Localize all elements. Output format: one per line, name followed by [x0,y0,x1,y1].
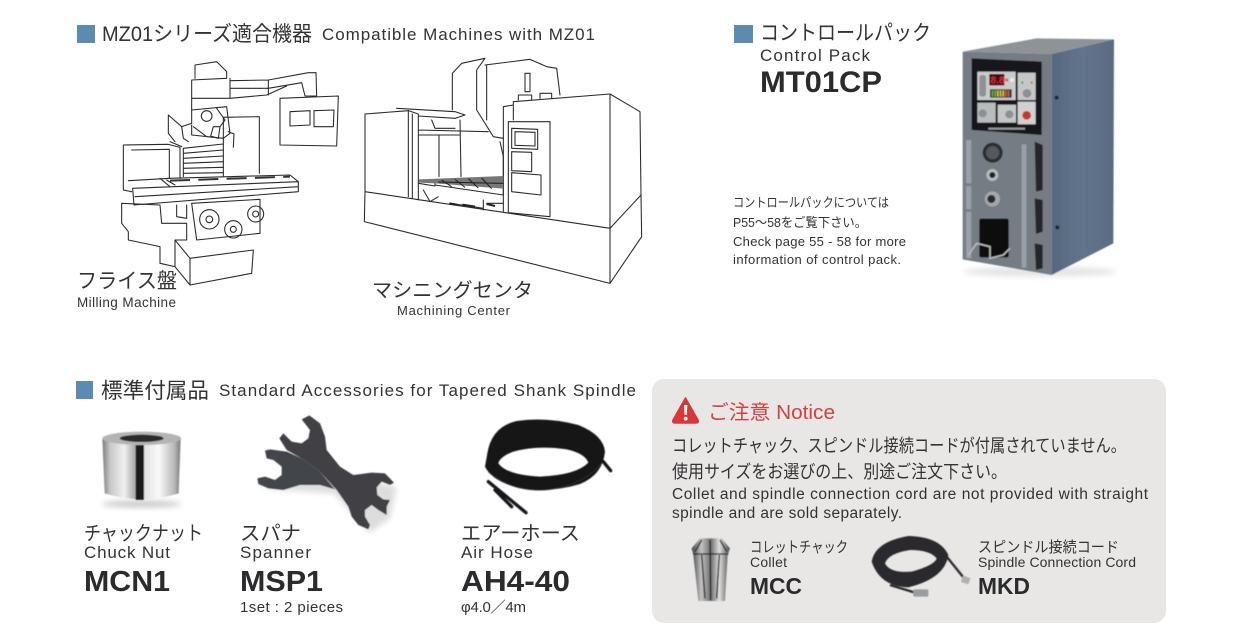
accessory: air hose: AH4-40 [461,566,570,598]
text block: control pack reference: コントロールパックについては [733,195,889,210]
label: milling machine [77,270,177,310]
section heading: compatible machines: Compatible Machines with MZ01 [322,25,595,44]
label: milling machine: フライス盤 [77,270,177,293]
notice body text [672,436,1149,522]
section heading: control pack: MT01CP [760,66,882,99]
notice heading: ご注意 Notice [708,401,835,424]
accessory: chuck nut: チャックナット [84,522,203,545]
section heading: standard accessories [76,379,636,403]
photo: control pack unit [963,38,1117,276]
accessory: spanner: MSP1 [240,566,323,598]
accessory: air hose: φ4.0／4m [461,599,526,616]
notice body text: spindle and are sold separately. [672,505,902,522]
item: collet: Collet [750,554,787,570]
text block: control pack reference: P55～58をご覧下さい。 [733,215,867,230]
section heading: standard accessories: 標準付属品 [101,379,209,403]
photo: spindle cord [872,536,971,597]
section heading: control pack: Control Pack [760,46,870,65]
connectors [966,96,1059,270]
item: spindle connection cord: MKD [978,573,1030,599]
label: machining center: マシニングセンタ [372,279,533,302]
item: spindle connection cord: スピンドル接続コード [978,539,1119,556]
notice body text: コレットチャック、スピンドル接続コードが付属されていません。 [672,436,1126,456]
item: collet: コレットチャック [750,539,848,556]
photo: air hose [485,420,611,513]
accessory: spanner [240,415,397,616]
section heading: compatible machines: MZ01シリーズ適合機器 [102,23,312,46]
accessory: air hose [461,420,611,616]
illustration: milling machine [122,62,338,285]
label: machining center [372,279,533,318]
icon: warning triangle [673,398,698,423]
accessory: air hose: エアーホース [461,523,580,545]
item: collet [692,538,848,601]
item: spindle connection cord [872,536,1136,599]
photo: chuck nut [102,432,182,507]
section heading: compatible machines [77,23,595,46]
accessory: chuck nut: Chuck Nut [84,543,170,562]
control panel [972,58,1042,135]
item: spindle connection cord: Spindle Connection Cord [978,554,1136,570]
accessory: chuck nut [84,432,203,598]
illustration: machining center [364,58,642,283]
accessory: chuck nut: MCN1 [84,566,170,598]
notice body text: 使用サイズをお選びの上、別途ご注文下さい。 [672,462,1007,482]
label: machining center: Machining Center [397,303,511,318]
text block: control pack reference: Check page 55 - 58 for more [733,234,906,249]
accessory: spanner: 1set : 2 pieces [240,599,343,616]
label: milling machine: Milling Machine [77,295,176,310]
panel: notice [652,379,1166,623]
accessory: spanner: スパナ [240,523,301,545]
section heading: control pack [734,22,931,99]
notice body text: Collet and spindle connection cord are not provided with straight [672,486,1149,503]
photo: spanner [257,415,397,533]
accessory: air hose: Air Hose [461,543,533,562]
section heading: control pack: コントロールパック [760,22,931,45]
item: collet: MCC [750,573,802,599]
photo: collet [692,538,730,601]
text block: control pack reference: information of control pack. [733,252,901,267]
section heading: standard accessories: Standard Accessories for Tapered Shank Spindle [219,381,636,400]
control panel: 8.8 [991,75,1005,86]
accessory: spanner: Spanner [240,543,311,562]
text block: control pack reference [733,195,906,267]
